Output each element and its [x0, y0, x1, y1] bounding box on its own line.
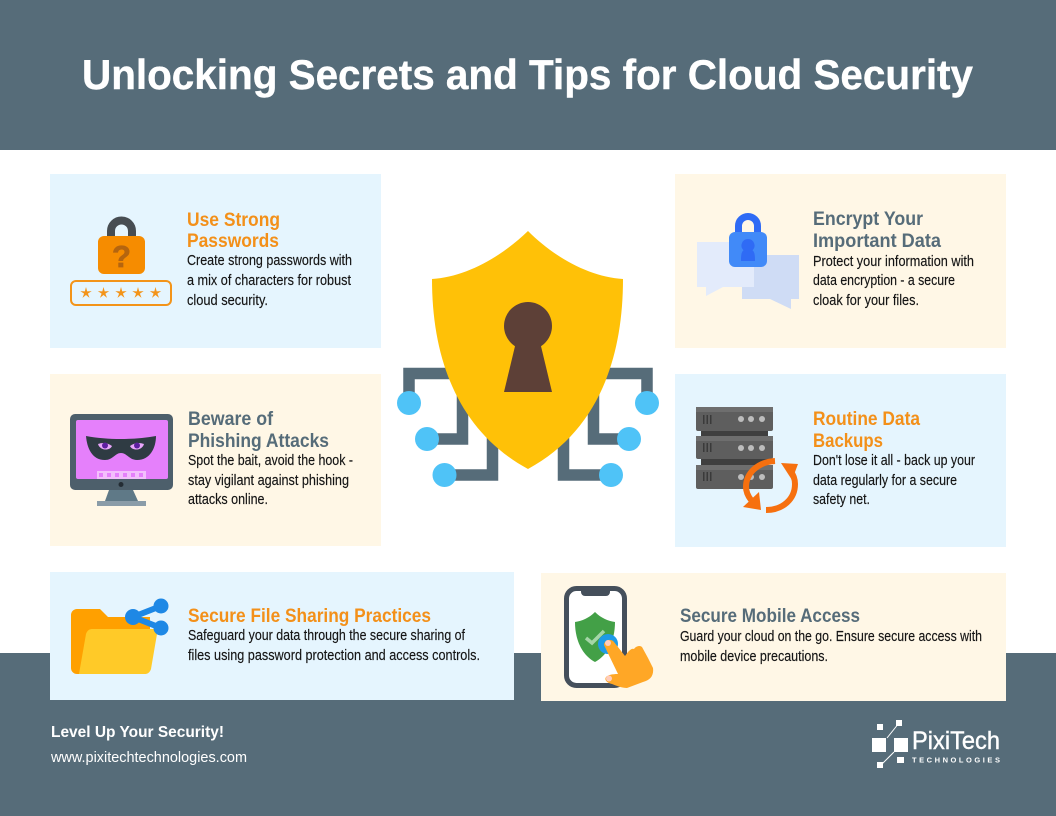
panel: use strong passwords — [50, 174, 381, 348]
text: use strong passwords: Create strong passwords with — [187, 253, 352, 269]
text: beware of phishing — [188, 453, 353, 508]
footer text: Level Up Your Security! — [51, 724, 224, 741]
text: secure file sharing: files using password protection and access controls. — [188, 648, 480, 664]
text: secure file sharing — [188, 628, 480, 664]
shield — [432, 231, 623, 469]
footer band — [0, 653, 1056, 816]
header band — [0, 0, 1056, 150]
title: Unlocking Secrets and Tips for Cloud Security — [82, 51, 974, 98]
text: beware of phishing: Spot the bait, avoid the hook - — [188, 453, 353, 469]
text: secure mobile access: mobile device precautions. — [680, 649, 828, 665]
text: use strong passwords — [187, 253, 352, 309]
panel: secure file sharing — [50, 572, 514, 700]
heading: beware of phishing: Phishing Attacks — [188, 430, 329, 452]
footer text — [50, 724, 247, 766]
icon: monitor with masked face — [70, 414, 173, 506]
text: use strong passwords: cloud security. — [187, 293, 268, 309]
text: use strong passwords: a mix of characters for robust — [187, 273, 351, 289]
heading: use strong passwords — [187, 209, 280, 252]
icon: phone with shield and tapping hand — [566, 587, 653, 688]
heading: beware of phishing — [188, 408, 329, 452]
footer text: www.pixitechtechnologies.com — [50, 750, 247, 766]
icon: server stack with sync arrows — [696, 407, 798, 510]
text: secure mobile access: Guard your cloud on the go. Ensure secure access with — [680, 629, 982, 645]
icon: chat bubbles with lock — [697, 216, 799, 309]
heading: secure file sharing: Secure File Sharing Practices — [188, 605, 431, 627]
text: routine data backups — [813, 453, 975, 508]
icon: padlock with password — [71, 220, 171, 305]
circuit lines — [409, 374, 647, 475]
heading: use strong passwords: Use Strong — [187, 209, 280, 231]
heading: encrypt your data: Encrypt Your — [813, 208, 923, 230]
text: encrypt your data: data encryption - a secure — [813, 273, 955, 289]
panel: secure mobile access — [541, 573, 1006, 701]
heading: use strong passwords: Passwords — [187, 230, 279, 252]
central shield with circuit lines — [397, 231, 659, 487]
circuit nodes — [397, 391, 659, 487]
icon: folder with share symbol — [71, 598, 168, 674]
text: secure mobile access — [680, 629, 982, 665]
text: routine data backups: Don't lose it all - back up your — [813, 453, 975, 469]
logo: PixiTech Technologies — [872, 720, 1000, 768]
text: encrypt your data: cloak for your files. — [813, 293, 919, 309]
heading: routine data backups: Routine Data — [813, 408, 920, 430]
panel: beware of phishing — [50, 374, 381, 546]
heading: routine data backups: Backups — [813, 430, 883, 452]
logo: PixiTech Technologies: PixiTech — [912, 727, 1000, 755]
panel: routine data backups — [675, 374, 1006, 547]
text: beware of phishing: stay vigilant against phishing — [188, 473, 349, 489]
icon: padlock with password: ? — [112, 239, 131, 274]
text: beware of phishing: attacks online. — [188, 492, 268, 508]
text: routine data backups: safety net. — [813, 492, 870, 508]
heading: secure mobile access: Secure Mobile Access — [680, 605, 860, 627]
heading: beware of phishing: Beware of — [188, 408, 273, 430]
text: encrypt your data — [813, 254, 974, 309]
panel: encrypt your data — [675, 174, 1006, 348]
text: secure file sharing: Safeguard your data through the secure sharing of — [188, 628, 466, 644]
text: routine data backups: data regularly for a secure — [813, 473, 957, 489]
heading: encrypt your data — [813, 208, 941, 252]
heading: routine data backups — [813, 408, 920, 452]
logo: PixiTech Technologies: TECHNOLOGIES — [912, 756, 1000, 764]
text: encrypt your data: Protect your information with — [813, 254, 974, 270]
keyhole — [504, 302, 552, 392]
heading: encrypt your data: Important Data — [813, 230, 941, 252]
